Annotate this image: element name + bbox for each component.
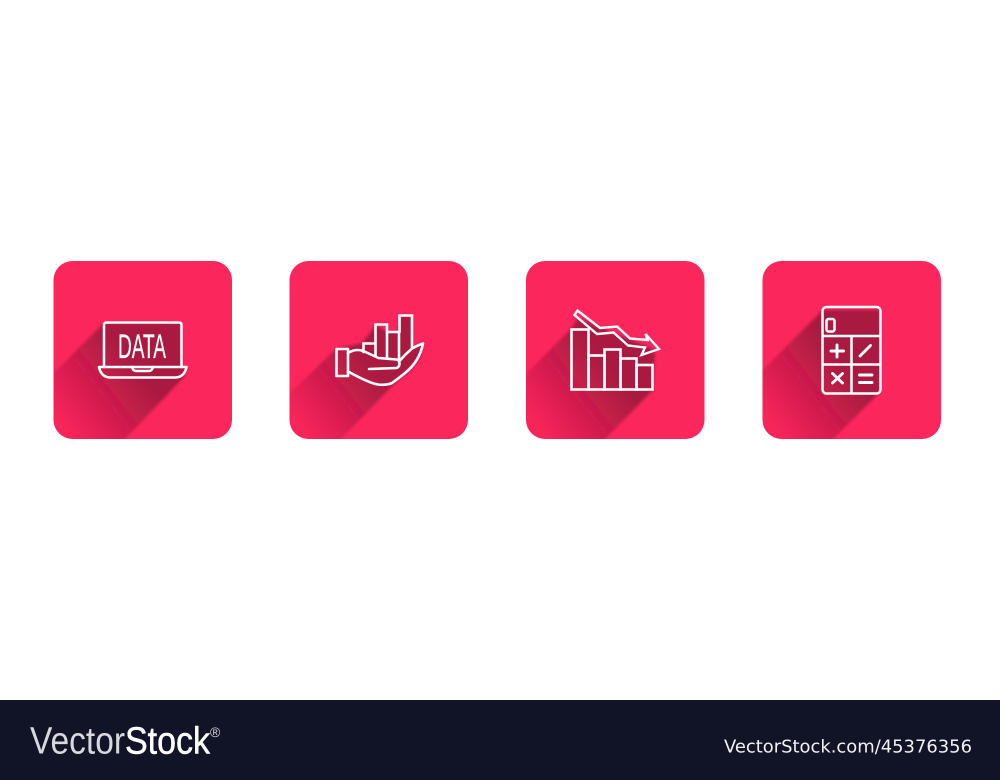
panel: hand with bar chart card	[286, 261, 468, 442]
long shadow: calculator	[759, 310, 880, 442]
image id text: VectorStock.com/45376356	[724, 736, 972, 758]
logo: VectorStock: Vector	[30, 720, 125, 762]
long shadow: chart	[523, 318, 655, 442]
icon: calculator	[822, 307, 880, 394]
long shadow: laptop	[50, 323, 187, 442]
logo: VectorStock: ®	[210, 724, 221, 740]
arrow: downward trend	[574, 310, 659, 355]
panel: calculator card	[759, 261, 941, 442]
label: DATA: DATA	[118, 328, 166, 366]
icon: laptop with DATA screen	[99, 322, 186, 378]
icon: hand holding bar chart	[336, 316, 423, 385]
logo: VectorStock	[30, 720, 221, 762]
footer bar	[0, 700, 1000, 780]
long shadow: hand	[286, 316, 423, 442]
logo: VectorStock: Stock	[125, 720, 211, 762]
icon: bar chart with down arrow	[572, 310, 659, 390]
panel: laptop data card	[50, 261, 232, 442]
panel: falling bar chart card	[523, 261, 704, 442]
